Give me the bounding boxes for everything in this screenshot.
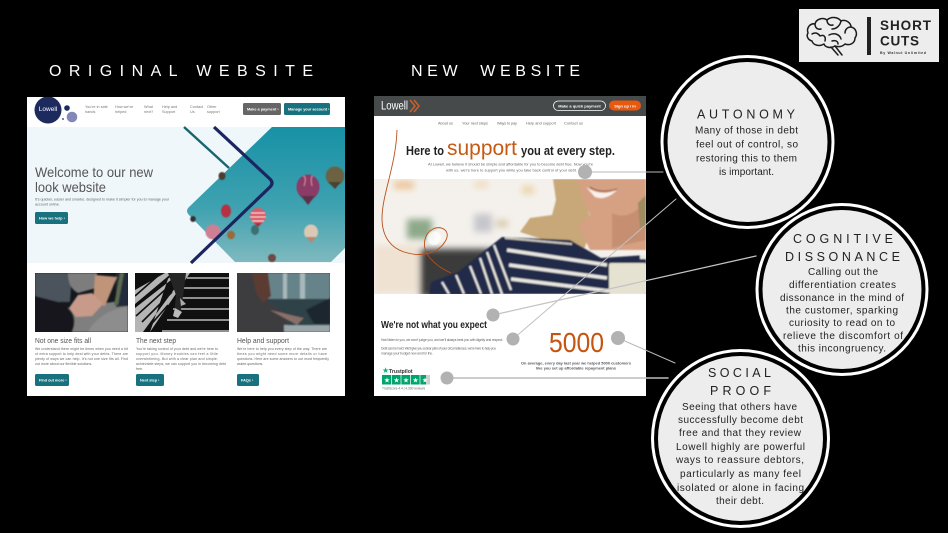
site navigation: Ways to pay [497,120,517,126]
callout: social proof: successfully become debt [678,415,803,426]
callout: social proof: particularly as many feel [680,469,801,480]
callout: cognitive dissonance [756,203,928,376]
hero body text: At Lowell, we believe it should be simple and affordable for you to become debt free. Now you're [428,162,593,166]
card: the next step: achievable steps, we can support you in becoming debt [136,362,226,366]
card: not one size fits all: We understand there might be times when you need a bit [35,347,128,351]
button: FAQs: FAQs › [241,378,254,382]
callout: cognitive dissonance: COGNITIVE [793,232,893,246]
callout: social proof: ways to reassure debtors, [675,455,804,466]
site navigation: Help and support [526,120,557,126]
card: the next step: support you. Money troubles can feel a little [136,352,218,356]
button: how we help [35,212,68,224]
section: we're not what you expect: We're not what you expect [381,320,488,331]
trustpilot rating [382,366,430,390]
button: manage your account: Manage your account › [288,108,330,112]
navigation: next? [144,110,153,114]
stat: 5000 customers: 5000 [549,327,604,358]
hero text: Welcome to our new [35,165,153,180]
logo: Lowell circles: Lowell [39,106,58,113]
card: help and support: times you might need some more details or have [237,352,327,356]
callout: social proof: PROOF [710,384,771,398]
card: the next step: You're taking control of your debt and we're here to [136,347,218,351]
site navigation: Contact us [564,120,583,126]
panel: original website screenshot [27,96,345,396]
card: the next step: overwhelming. But with a clear plan and simple, [136,357,218,361]
navigation: hands [85,110,95,114]
navigation: What [144,105,154,109]
trustpilot rating: ★ [382,366,389,375]
callout: cognitive dissonance: curiosity to read on to [789,318,895,329]
callout: social proof: Seeing that others have [682,402,797,413]
callout: cognitive dissonance: this incongruency. [798,344,886,354]
callout: autonomy: AUTONOMY [697,108,796,122]
logo: Lowell circles [34,96,77,124]
navigation: How we've [115,105,133,109]
card: help and support: questions. Here are some answers to our most frequently [237,357,329,361]
hero graphic: balloons diamond [184,127,345,263]
card: help and support: asked questions. [237,362,263,366]
navigation: support [207,110,221,114]
logo: short cuts [799,9,939,62]
callout: autonomy: Many of those in debt [695,126,798,136]
navigation: helped [115,110,126,114]
logo: short cuts: By Walnut Unlimited [880,51,926,55]
hero text: It's quicker, easier and smarter, designed to make it simpler for you to manage your [35,198,170,202]
button: FAQs [237,374,259,386]
card: the next step: free. [136,367,143,371]
callout: cognitive dissonance: Calling out the [808,267,878,278]
section: we're not what you expect [381,320,503,356]
button: make a payment [243,103,281,115]
trustpilot rating: Trustpilot [389,369,413,375]
icon: brain [807,17,856,55]
logo: short cuts: CUTS [880,34,919,48]
site header: Lowell [381,100,408,112]
card: help and support: Help and support [237,336,290,345]
card: the next step: The next step [136,336,176,345]
button: how we help: How we help › [39,216,66,220]
navigation: Support [162,110,176,114]
card: help and support [237,336,329,366]
site navigation: About us [438,120,453,126]
callout: social proof: SOCIAL [708,366,771,380]
trustpilot rating: ★ [412,376,419,384]
button: make a payment: Make a payment › [247,108,279,112]
section: we're not what you expect: Debt can be hard. We'll give you a clear plan of your circumstances, we're here to help you [381,346,496,350]
callout: social proof: isolated or alone in facing [677,483,804,494]
callout: cognitive dissonance: DISSONANCE [785,250,900,264]
hero photo: smiling woman [374,179,646,297]
card: not one size fits all: plenty of ways we can help. It's not one size fits all. Find [35,357,128,361]
panel: new website screenshot [374,96,646,396]
connector lines [447,172,756,378]
heading: original website: ORIGINAL WEBSITE [49,63,313,80]
trustpilot rating: ★ [393,376,400,384]
callout: cognitive dissonance: the customer, sparking [786,306,898,316]
trustpilot rating: TrustScore 4.4 | 4,300 reviews [382,386,425,390]
decorative orange line [382,130,451,273]
navigation: Other [207,105,217,109]
navigation: Help and [162,105,177,109]
callout: autonomy: is important. [719,167,774,178]
callout: autonomy: feel out of control, so [696,140,798,150]
marker dots [440,165,625,384]
callout: autonomy: restoring this to them [696,154,797,164]
photo: woman with laptop [237,273,330,332]
stat: 5000 customers: like you set up affordable repayment plans [536,366,616,370]
navigation [85,105,221,114]
hero headline: you at every step. [521,144,615,158]
site navigation [438,120,583,126]
site header: Make a quick payment [558,104,601,108]
photo: clasped hands [35,273,128,332]
callout: cognitive dissonance: relieve the discomfort of [783,331,903,342]
callout: social proof: their debt. [716,496,764,507]
button: find out more [35,374,69,386]
heading: new website: NEW WEBSITE [411,63,580,80]
hero headline: Here to [406,144,444,158]
trustpilot rating: ★ [403,376,409,384]
button: next step: Next step › [140,378,160,382]
card: not one size fits all: out more about our flexible solutions. [35,362,92,366]
photo: stairs [135,273,229,332]
hero headline [406,136,615,160]
card: the next step [136,336,226,371]
callout: cognitive dissonance: dissonance in the mind of [780,293,904,304]
button: manage your account [284,103,330,115]
section: we're not what you expect: Hold listen to you, we won't judge you, and we'll always treat you with dignity and respect. [381,338,503,342]
stat: 5000 customers [521,327,631,370]
callout: cognitive dissonance: differentiation creates [789,280,896,291]
trustpilot rating: ★ [422,376,428,384]
navigation: Contact [190,105,204,109]
callout: autonomy [660,55,834,229]
site header: Sign up / in [614,104,636,108]
trustpilot rating: ★ [384,376,390,384]
card: not one size fits all [35,336,128,366]
callout: social proof [651,349,830,528]
section: we're not what you expect: manage your budget now and for the. [381,352,433,356]
stat: 5000 customers: On average, every day last year we helped 5000 customers [521,360,631,366]
hero text [35,165,170,206]
callout: social proof: Lowell highly are powerful [676,442,805,453]
callout: social proof: free and that they review [679,428,802,439]
button: next step [136,374,164,386]
site header [374,96,646,116]
hero body text [428,162,593,172]
site navigation: Your next steps [462,120,488,126]
card: not one size fits all: Not one size fits all [35,336,91,345]
navigation: Us [190,110,195,114]
button: find out more: Find out more › [39,378,67,382]
logo: short cuts: SHORT [880,18,932,33]
hero text: look website [35,180,106,195]
hero text: account online. [35,202,60,206]
navigation: You're in safe [85,105,108,109]
card: help and support: We're here to help you every step of the way. There are [237,347,327,351]
card: not one size fits all: of extra support to help deal with your debts. There are [35,352,128,356]
balloons [190,166,344,262]
hero body text: with us, we're here to support you while you take back control of your debt. [446,168,577,172]
hero headline: support [447,136,517,160]
